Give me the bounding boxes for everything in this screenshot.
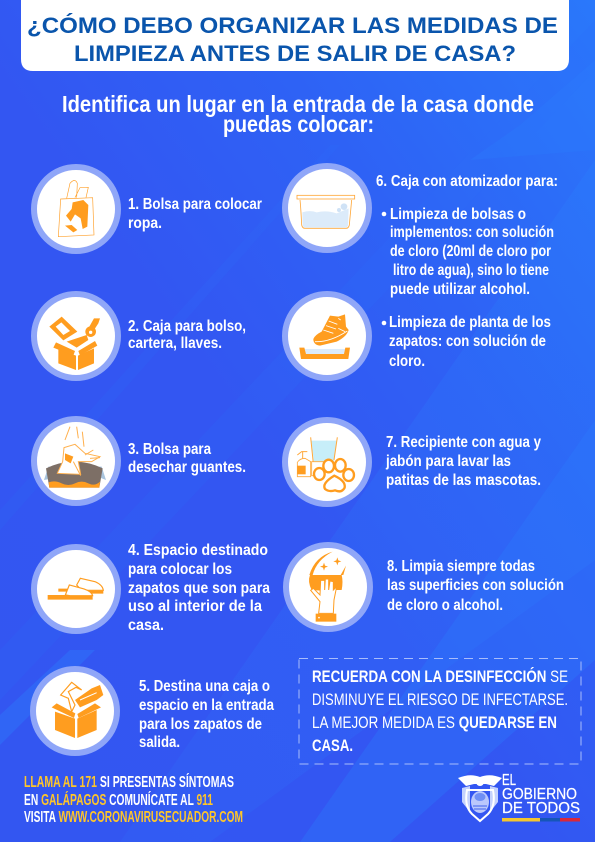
- icon: slippers: [34, 547, 118, 631]
- subtitle: Identifica un lugar en la entrada de la casa donde: [62, 91, 534, 117]
- footer contact text: LLAMA AL 171 SI PRESENTAS SÍNTOMAS: [24, 774, 234, 791]
- callout: reminder: LA MEJOR MEDIDA ES QUEDARSE EN: [312, 714, 557, 732]
- label 3: [128, 441, 246, 476]
- label 6: litro de agua), sino lo tiene: [393, 262, 549, 279]
- label 1: [128, 196, 262, 232]
- logo wordmark: [502, 772, 580, 817]
- title: [27, 13, 558, 66]
- item 6: box with sprayer: [285, 166, 558, 298]
- icon: container with water: [285, 166, 369, 250]
- callout: reminder: RECUERDA CON LA DESINFECCIÓN SE: [312, 667, 568, 686]
- footer contact text: EN GALÁPAGOS COMUNÍCATE AL 911: [24, 792, 213, 809]
- label 7: patitas de las mascotas.: [386, 472, 541, 489]
- icon: tote bag: [34, 167, 118, 251]
- logo wordmark: GOBIERNO: [502, 786, 577, 803]
- label 4: uso al interior de la: [128, 598, 262, 615]
- item 5: outdoor shoes box: [33, 669, 274, 753]
- label 7: jabón para lavar las: [385, 453, 511, 470]
- footer contact text: [24, 774, 243, 826]
- label 2: 2. Caja para bolso,: [128, 318, 246, 335]
- label 5: espacio en la entrada: [139, 697, 274, 714]
- label 1: ropa.: [128, 215, 162, 232]
- logo: El Gobierno de Todos: [458, 772, 580, 822]
- header panel: [21, 0, 569, 71]
- logo wordmark: DE TODOS: [502, 800, 580, 817]
- label 6: puede utilizar alcohol.: [390, 281, 530, 298]
- item 3: bag for gloves: [34, 419, 246, 503]
- label 4: casa.: [128, 617, 164, 634]
- footer contact text: VISITA WWW.CORONAVIRUSECUADOR.COM: [24, 809, 243, 826]
- label 6b: Limpieza de planta de los: [389, 314, 551, 331]
- label 8: las superficies con solución: [387, 577, 564, 594]
- item 7: water and soap for pets: [285, 420, 541, 504]
- item 8: clean surfaces: [286, 545, 564, 629]
- subtitle: [62, 91, 534, 137]
- label 2: [128, 318, 246, 352]
- icon: box with wallet and keys: [34, 294, 118, 378]
- subtitle: puedas colocar:: [223, 111, 374, 137]
- icon: glass, soap and paw: [285, 420, 369, 504]
- label 8: 8. Limpia siempre todas: [387, 558, 535, 575]
- title: LIMPIEZA ANTES DE SALIR DE CASA?: [74, 41, 516, 66]
- label 6: [376, 173, 558, 298]
- label 8: de cloro o alcohol.: [387, 597, 503, 614]
- label 5: [139, 678, 274, 751]
- item 4: indoor shoes space: [34, 542, 270, 634]
- label 6: de cloro (20ml de cloro por: [390, 243, 551, 260]
- icon: coat of arms: [458, 775, 502, 821]
- flag bar: [502, 818, 580, 822]
- label 6: 6. Caja con atomizador para:: [376, 173, 558, 190]
- label 4: zapatos que son para: [128, 580, 270, 597]
- logo wordmark: EL: [502, 772, 516, 789]
- title: ¿CÓMO DEBO ORGANIZAR LAS MEDIDAS DE: [27, 13, 558, 38]
- item 6b: shoe sole cleaning: [285, 294, 551, 378]
- label 6b: zapatos: con solución de: [389, 333, 546, 350]
- label 1: 1. Bolsa para colocar: [128, 196, 262, 213]
- icon: box with shoes: [33, 669, 117, 753]
- label 4: [128, 542, 270, 634]
- label 3: desechar guantes.: [128, 459, 246, 476]
- label 6: implementos: con solución: [390, 224, 554, 241]
- item 2: box for bag and keys: [34, 294, 246, 378]
- label 5: 5. Destina una caja o: [139, 678, 270, 695]
- label 6b: cloro.: [389, 353, 425, 370]
- label 7: 7. Recipiente con agua y: [386, 434, 541, 451]
- label 8: [387, 558, 564, 614]
- icon: gloves in bin: [34, 419, 118, 503]
- callout: reminder: [299, 658, 581, 764]
- icon: sneaker on tray: [285, 294, 369, 378]
- label 5: salida.: [139, 734, 180, 751]
- callout: reminder: CASA.: [312, 737, 353, 755]
- item 1: bag for clothes: [34, 167, 262, 251]
- label 2: cartera, llaves.: [128, 335, 222, 352]
- icon: hand wiping: [286, 545, 370, 629]
- label 7: [385, 434, 541, 489]
- label 4: 4. Espacio destinado: [128, 542, 268, 559]
- label 3: 3. Bolsa para: [128, 441, 211, 458]
- label 5: para los zapatos de: [139, 716, 262, 733]
- label 4: para colocar los: [128, 561, 232, 578]
- label 6b: [382, 314, 551, 370]
- label 6: Limpieza de bolsas o: [390, 206, 526, 223]
